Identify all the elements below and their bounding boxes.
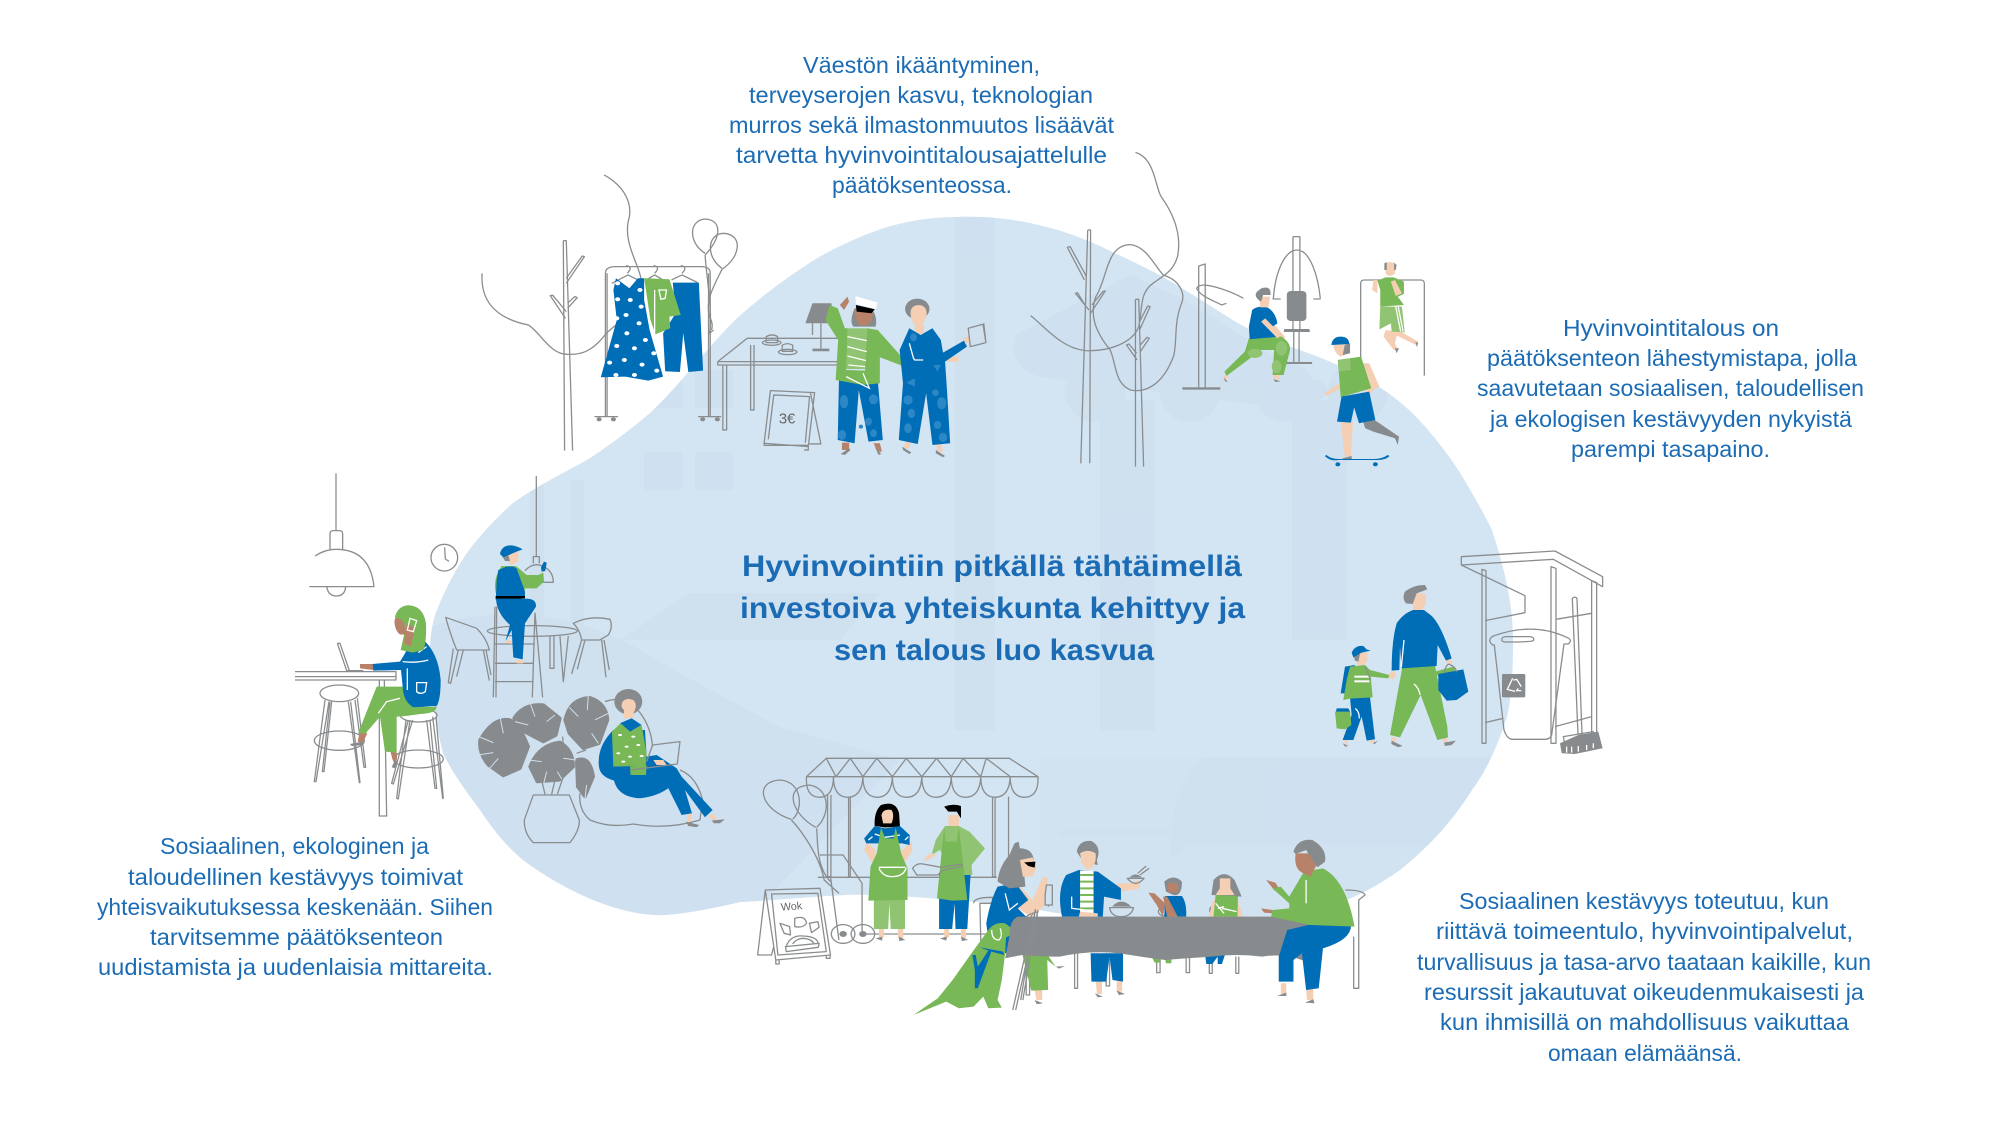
central blob [420,210,1520,930]
broom [1572,597,1582,734]
wok sign [758,888,830,964]
text block: right: ja ekologisen kestävyyden nykyistä [1489,406,1853,432]
text block: right: Hyvinvointitalous on [1563,315,1779,341]
text block: top: terveyserojen kasvu, teknologian [749,82,1093,108]
woman on right [1261,880,1280,913]
balloons [763,780,839,893]
market stall [806,758,1038,943]
worker on ladder: lamp, ladder, table, chairs [446,476,611,697]
illustration: food stall and dining table (bottom) [758,758,1365,1015]
text block: bottom right: kun ihmisillä on mahdollisuus vaikuttaa [1440,1009,1850,1035]
fitness machines [1199,237,1321,387]
balloons [693,219,737,333]
boy with bag [1335,646,1393,747]
stretching man [1223,287,1290,382]
plant pot [524,795,579,843]
jeans [663,283,703,372]
illustration: food stall and dining table (bottom): Wok [780,900,803,914]
bare tree and wavy line [482,175,642,451]
pull-up bar [1361,280,1424,376]
illustration: recycling (right) [1335,551,1603,754]
text block: bottom right: omaan elämäänsä. [1548,1040,1742,1066]
student [826,296,911,455]
illustration: cafe (left) [295,473,725,843]
woman with laptop in chair [580,689,725,827]
illustration: flea market (top left): 3€ [779,411,795,427]
text block: right: saavutetaan sosiaalisen, taloudellisen [1477,375,1864,401]
man with bags [1389,585,1468,747]
family at table [1005,840,1355,1010]
text block: right: parempi tasapaino. [1571,436,1770,462]
main heading: Hyvinvointiin pitkällä tähtäimellä [742,550,1242,583]
monstera plant [478,694,608,798]
text block: bottom right: riittävä toimeentulo, hyvinvointipalvelut, [1436,918,1853,944]
chair backs [974,890,1365,995]
text block: bottom right: Sosiaalinen kestävyys toteutuu, kun [1459,888,1829,914]
text block: right: päätöksenteon lähestymistapa, jolla [1487,345,1858,371]
text block: top: Väestön ikääntyminen, [803,52,1040,78]
text block: right [1477,315,1864,462]
main heading: investoiva yhteiskunta kehittyy ja [740,592,1245,625]
table cloth [1005,917,1315,960]
shirt [644,278,681,334]
wall clock [431,544,458,571]
main heading: sen talous luo kasvua [834,634,1154,667]
text block: bottom right: resurssit jakautuvat oikeudenmukaisesti ja [1424,979,1865,1005]
text block: left: Sosiaalinen, ekologinen ja [160,833,430,859]
recycling symbol [1507,678,1521,691]
skater [1324,337,1399,466]
cafe table and lamp [718,323,840,430]
clothes rack [594,266,721,417]
trees [1067,230,1150,467]
bar stools [314,685,443,799]
wavy lines [1031,152,1244,391]
text block: left: uudistamista ja uudenlaisia mittareita. [98,954,493,980]
text block: top: tarvetta hyvinvointitalousajattelulle [736,142,1107,168]
illustration: outdoor gym (top right) [1031,152,1424,467]
main heading [740,550,1245,667]
work bar with laptop [295,643,396,816]
text block: left [97,833,493,980]
man hanging [1372,262,1418,353]
text block: left: yhteisvaikutuksessa keskenään. Siihen [97,894,493,920]
price sign [764,391,821,450]
text block: left: taloudellinen kestävyys toimivat [128,864,463,890]
text block: bottom right: turvallisuus ja tasa-arvo taataan kaikille, kun [1417,949,1871,975]
stall woman [864,804,913,941]
bin [1490,629,1570,739]
text block: top: päätöksenteossa. [832,172,1012,198]
text block: top: murros sekä ilmastonmuutos lisäävät [729,112,1114,138]
woman on phone [350,605,441,768]
dress [601,278,663,381]
text block: top [729,52,1114,198]
illustration: flea market (top left) [482,175,986,457]
pendant lamp [309,473,374,596]
woman with guide dog [913,842,1065,1015]
text block: bottom right [1417,888,1871,1066]
text block: left: tarvitsemme päätöksenteon [150,924,443,950]
stall man [913,805,985,941]
waste shelter [1461,551,1603,743]
woman with tablet [899,299,986,457]
